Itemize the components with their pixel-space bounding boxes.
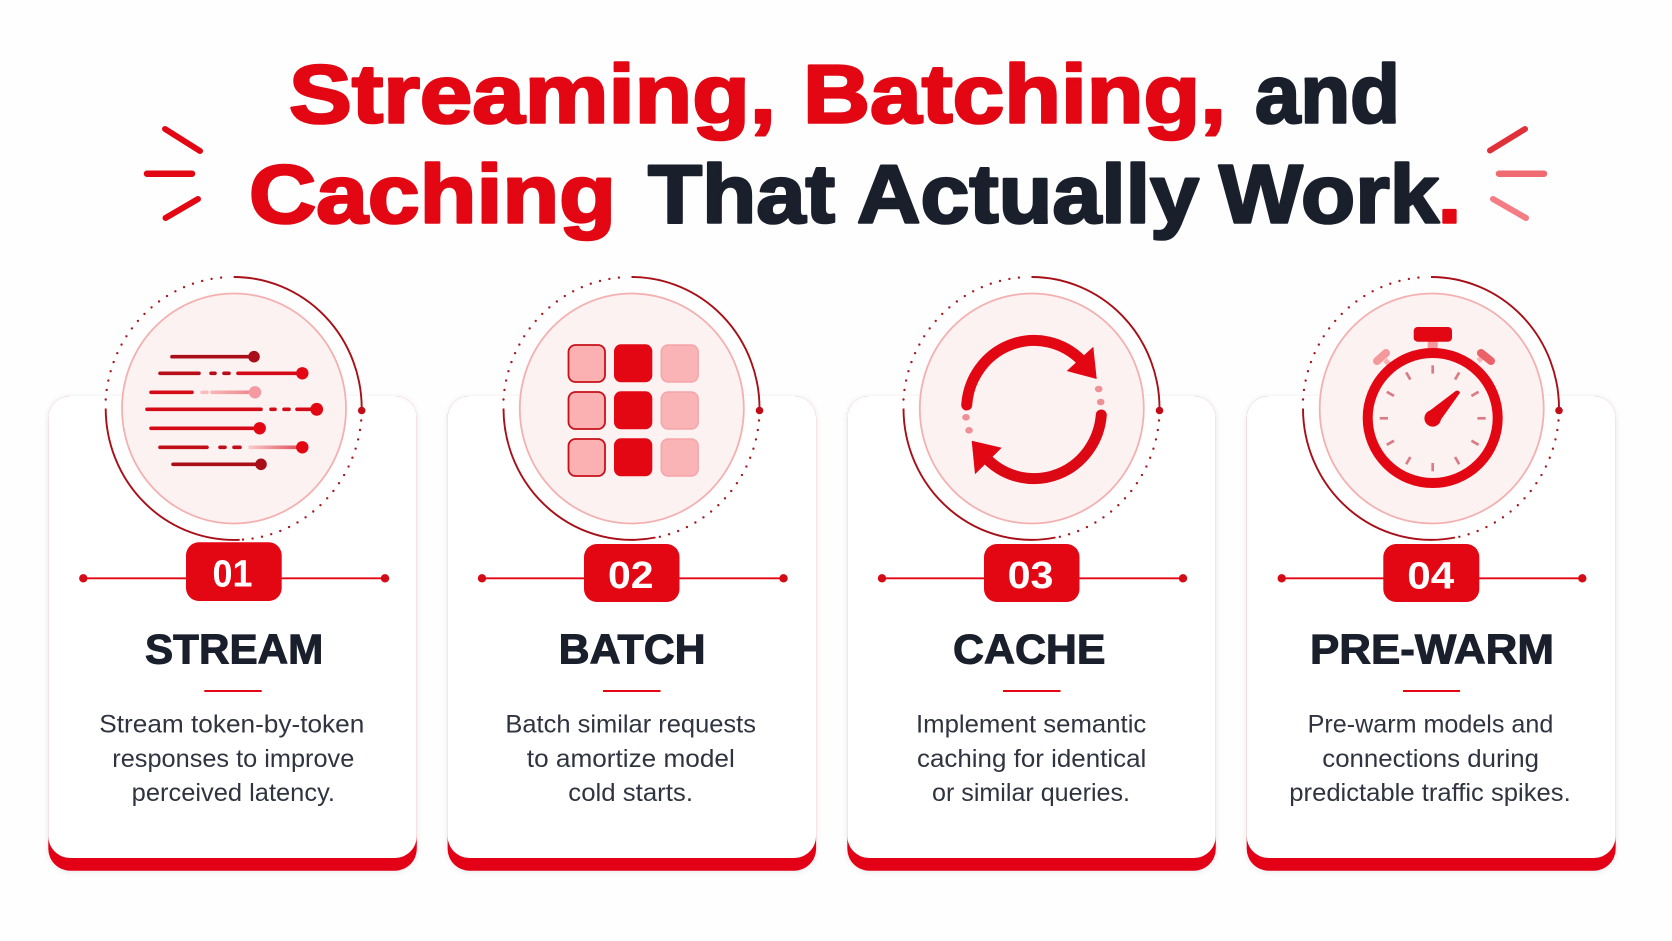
- title: .: [1438, 148, 1461, 241]
- heading: cache: CACHE: [953, 625, 1106, 672]
- ring 4: [1303, 277, 1563, 540]
- title: and: [1255, 48, 1400, 141]
- connector line 1: [79, 574, 389, 582]
- badge 04: [1383, 544, 1479, 602]
- title: [249, 48, 1461, 241]
- icon: cycle arrows: [962, 340, 1104, 479]
- text: pre-warm description: predictable traffic spikes.: [1289, 779, 1571, 807]
- card 3 background: [847, 396, 1216, 871]
- text: cache description: [916, 711, 1146, 807]
- panel: batch: [448, 277, 816, 871]
- text: batch description: cold starts.: [568, 779, 693, 807]
- text: batch description: Batch similar requests: [505, 711, 756, 739]
- panel: cache: [847, 277, 1216, 871]
- icon: request grid: [568, 344, 698, 476]
- text: batch description: [505, 711, 756, 807]
- heading: batch: BATCH: [559, 625, 706, 672]
- panel: stream: [48, 277, 417, 871]
- connector line 4: [1278, 574, 1587, 582]
- title: Streaming,: [289, 48, 776, 141]
- icon: token stream lines: [147, 351, 323, 470]
- title: Batching,: [803, 48, 1226, 141]
- title: Caching: [249, 148, 616, 241]
- text: stream description: Stream token-by-token: [99, 711, 364, 739]
- ring 2: [504, 277, 763, 540]
- heading: stream: STREAM: [145, 625, 323, 672]
- title: Actually: [857, 148, 1199, 241]
- badge 01: 01: [212, 554, 252, 596]
- connector line 3: [878, 574, 1187, 582]
- panel: pre-warm: [1247, 277, 1616, 871]
- ring 3: [904, 277, 1163, 540]
- text: cache description: caching for identical: [917, 745, 1146, 773]
- connector line 2: [478, 574, 788, 582]
- badge 02: [584, 544, 680, 602]
- card 4 background: [1247, 396, 1616, 871]
- text: stream description: [99, 711, 364, 807]
- badge 03: 03: [1008, 555, 1054, 597]
- title: That: [648, 148, 835, 241]
- badge 04: 04: [1407, 555, 1454, 597]
- badge 03: [984, 544, 1080, 602]
- icon: left burst rays: [147, 129, 200, 218]
- card 1 background: [48, 396, 417, 871]
- text: cache description: Implement semantic: [916, 711, 1146, 739]
- badge 01: [186, 542, 282, 601]
- title: Work: [1219, 148, 1440, 241]
- text: stream description: responses to improve: [112, 745, 354, 773]
- badge 02: 02: [608, 555, 654, 597]
- icon: right burst rays: [1490, 129, 1544, 218]
- text: pre-warm description: [1289, 711, 1571, 807]
- icon: stopwatch: [1368, 327, 1498, 483]
- text: pre-warm description: Pre-warm models and: [1308, 711, 1553, 739]
- ring 1: [106, 277, 365, 540]
- heading: pre-warm: PRE-WARM: [1310, 625, 1554, 672]
- text: pre-warm description: connections during: [1322, 745, 1539, 773]
- text: stream description: perceived latency.: [132, 779, 335, 807]
- text: cache description: or similar queries.: [932, 779, 1130, 807]
- text: batch description: to amortize model: [527, 745, 735, 773]
- card 2 background: [448, 396, 816, 871]
